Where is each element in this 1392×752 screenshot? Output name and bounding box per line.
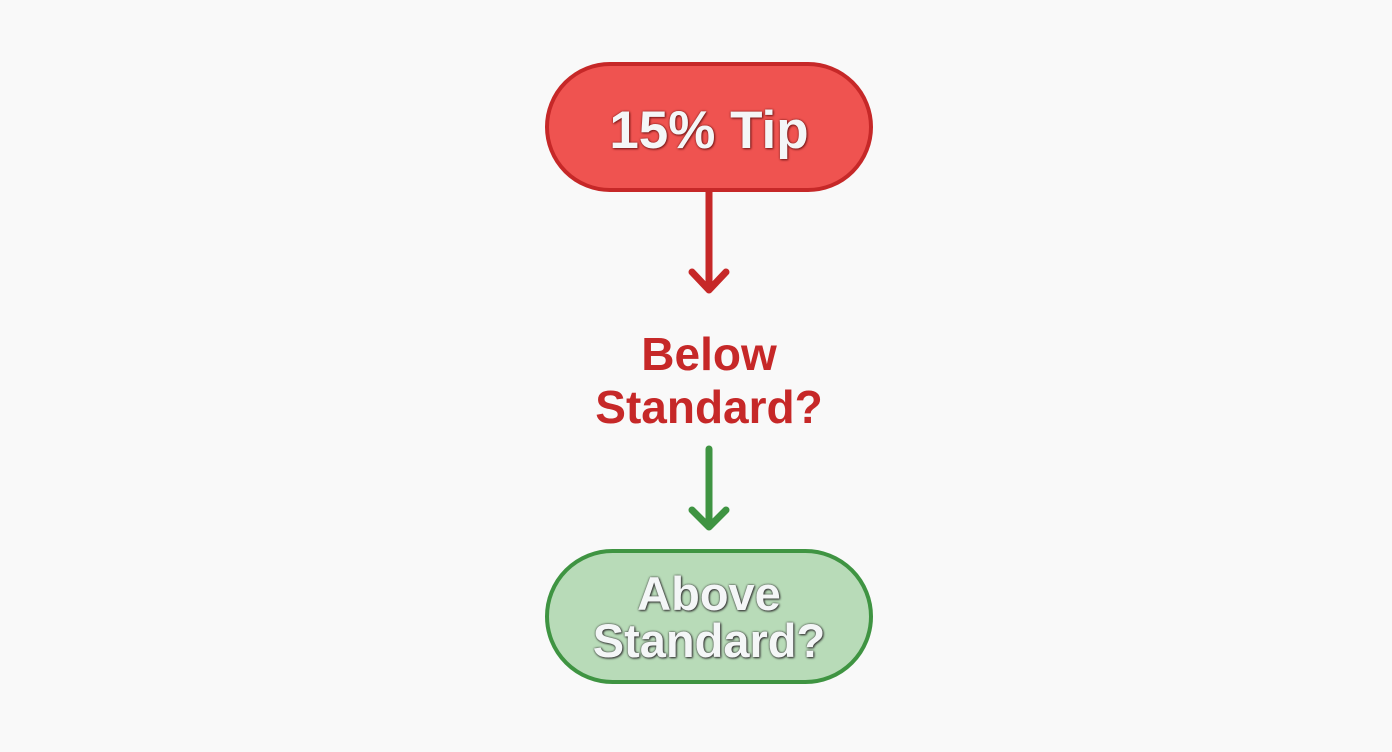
arrow: red down bbox=[688, 192, 730, 294]
box: 15% Tip: 15% Tip bbox=[609, 100, 809, 160]
text: Below Standard? bbox=[595, 328, 823, 433]
box: Above Standard?: Above bbox=[637, 566, 781, 620]
box: 15% Tip bbox=[545, 62, 873, 192]
box: Above Standard? bbox=[545, 549, 873, 684]
arrow: green down bbox=[688, 446, 730, 530]
text: Below Standard?: Below bbox=[641, 328, 777, 380]
text: Below Standard?: Standard? bbox=[595, 381, 823, 433]
box: Above Standard?: Standard? bbox=[593, 614, 825, 666]
